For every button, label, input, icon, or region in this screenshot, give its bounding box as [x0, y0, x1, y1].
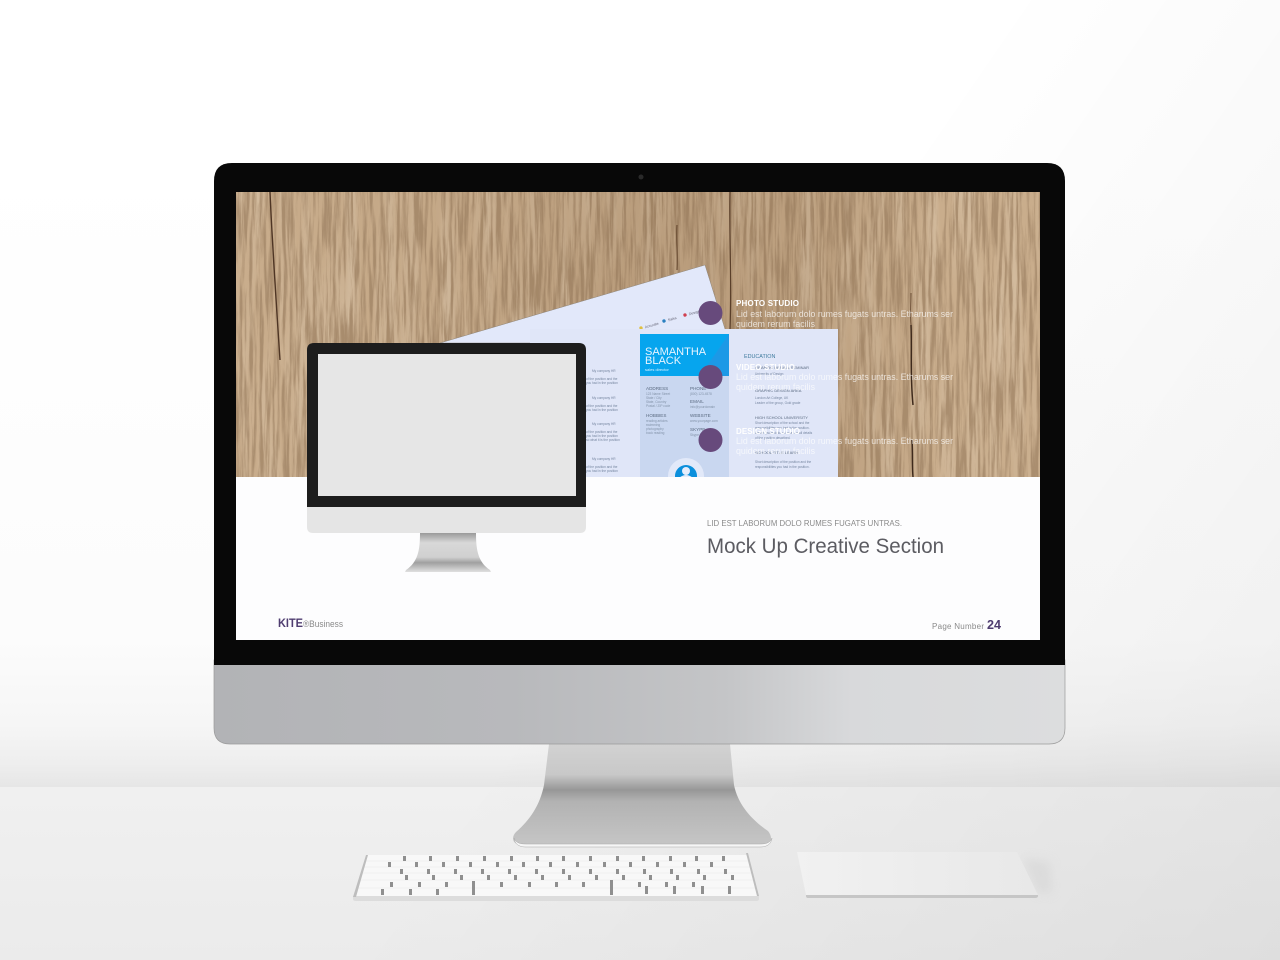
keyboard keys row 3: [400, 869, 727, 874]
keyboard keys row 4: [405, 875, 734, 880]
item: video studio: [736, 363, 953, 392]
resume contact details: Skype: [690, 433, 699, 437]
item: video studio: quidem rerum facilis: [736, 382, 816, 392]
item: design studio: DESIGN STUDIO: [736, 427, 800, 436]
resume contact details: [646, 386, 718, 437]
resume name header: SAMANTHA: [645, 346, 707, 358]
resume contact details: State / City: [646, 396, 662, 400]
resume contact details: photography: [646, 427, 664, 431]
small monitor bezel: [307, 343, 586, 507]
item: design studio: quidem rerum facilis: [736, 446, 816, 456]
resume front sheet: [530, 329, 838, 477]
resume contact details: swimming: [646, 423, 660, 427]
slide white background: [236, 192, 1040, 640]
item: photo studio: PHOTO STUDIO: [736, 299, 799, 308]
resume name header: [640, 334, 729, 376]
small monitor illustration: [307, 343, 586, 572]
section subtitle: LID EST LABORUM DOLO RUMES FUGATS UNTRAS.: [707, 519, 902, 528]
resume back sheet: [440, 265, 725, 343]
resume contact details: 123 Name Street: [646, 392, 670, 396]
resume left column text: [586, 369, 620, 473]
resume left column text: of the position and the: [586, 465, 618, 469]
item: design studio: [736, 427, 953, 456]
keyboard keys row 6: [381, 886, 731, 895]
resume education column: SCHOOL TITLE LEARN: [755, 450, 798, 455]
webcam: [638, 174, 644, 180]
wood photo: [236, 192, 1040, 477]
monitor chin: [214, 660, 1065, 744]
item: video studio: VIDEO STUDIO: [736, 363, 795, 372]
small monitor stand: [405, 533, 491, 572]
small monitor chin: [307, 500, 586, 533]
resume contact details: HOBBIES: [646, 413, 666, 418]
resume contact details: www.yourpage.com: [690, 419, 718, 423]
keyboard keys row 1: [403, 856, 725, 861]
resume contact details: info@yourdomain: [690, 405, 715, 409]
resume education column: responsibilities you had in the position.: [755, 426, 810, 430]
resume left column text: you had in the position: [586, 408, 618, 412]
resume education column: GRAPHIC DESIGN AREA: [755, 388, 802, 393]
item: photo studio: quidem rerum facilis: [736, 319, 816, 329]
resume contact details: State, Country: [646, 400, 667, 404]
trackpad: [797, 852, 1052, 898]
resume left column text: My company HR: [592, 396, 616, 400]
resume contact details: Postal / ZIP code: [646, 404, 670, 408]
resume education column: University of Design: [755, 372, 784, 376]
resume contact details: reading articles: [646, 419, 668, 423]
resume left column text: you had in the position: [586, 434, 618, 438]
footer page number: 24: [987, 618, 1001, 632]
resume contact details: ADDRESS: [646, 386, 668, 391]
resume name header: BLACK: [645, 355, 682, 367]
footer brand: [278, 616, 343, 630]
resume left column text: My company HR: [592, 457, 616, 461]
footer brand: ®Business: [303, 619, 343, 629]
resume back sheet: Design: [688, 309, 700, 316]
resume left column text: you had in the position: [586, 381, 618, 385]
resume education column: responsibilities you had in the position.: [755, 465, 810, 469]
resume left column text: so what it is the position: [586, 438, 620, 442]
keyboard keys row 5: [390, 880, 695, 895]
resume education column: Short description of the school and the: [755, 421, 810, 425]
section title: Mock Up Creative Section: [707, 535, 944, 558]
keyboard keys row 2: [388, 862, 713, 867]
item: video studio: Lid est laborum dolo rumes fugats untras. Etharums ser: [736, 372, 953, 382]
resume contact details: book reading: [646, 431, 665, 435]
resume education column: HIGH SCHOOL UNIVERSITY: [755, 415, 808, 420]
monitor body: [214, 163, 1065, 744]
footer brand: KITE: [278, 616, 303, 630]
resume education column: [744, 354, 813, 469]
resume education column: GRAPHIC DESIGN SEMINAR: [755, 365, 809, 370]
resume back sheet: Accurate: [644, 322, 659, 329]
footer page number: [932, 618, 1001, 632]
item: photo studio: [736, 299, 953, 329]
resume education column: Leader of the group, Gold grade: [755, 401, 801, 405]
resume left column text: of the position and the: [586, 404, 618, 408]
resume sidebar panel: [640, 376, 729, 477]
resume education column: London Art College, UK: [755, 396, 789, 400]
slide screen: [236, 192, 1040, 640]
resume contact details: PHONE: [690, 386, 706, 391]
keyboard: [353, 853, 759, 901]
resume left column text: of the position and the: [586, 430, 618, 434]
resume name header: sales director: [645, 367, 669, 372]
monitor stand: [513, 744, 772, 847]
item: design studio: Lid est laborum dolo rumes fugats untras. Etharums ser: [736, 436, 953, 446]
resume education column: EDUCATION: [744, 354, 775, 360]
resume left column text: My company HR: [592, 369, 616, 373]
resume back sheet: Sales: [667, 316, 677, 322]
resume avatar icon: [668, 458, 704, 477]
item: photo studio: Lid est laborum dolo rumes fugats untras. Etharums ser: [736, 309, 953, 319]
monitor bezel: [214, 163, 1065, 665]
small monitor screen: [318, 354, 576, 496]
resume contact details: WEBSITE: [690, 413, 711, 418]
resume contact details: (800) 123-4578: [690, 392, 712, 396]
resume left column text: My company HR: [592, 422, 616, 426]
footer page number: Page Number: [932, 622, 984, 631]
resume left column text: you had in the position: [586, 469, 618, 473]
timeline dots: [698, 301, 722, 452]
desk surface: [0, 787, 1280, 960]
resume left column text: of the position and the: [586, 377, 618, 381]
resume education column: of the position described.: [755, 436, 791, 440]
resume contact details: EMAIL: [690, 399, 704, 404]
resume contact details: SKYPE: [690, 427, 705, 432]
resume education column: Lorem ipsum dolor sit amet for all details: [755, 431, 813, 435]
resume education column: Short description of the position and the: [755, 460, 811, 464]
